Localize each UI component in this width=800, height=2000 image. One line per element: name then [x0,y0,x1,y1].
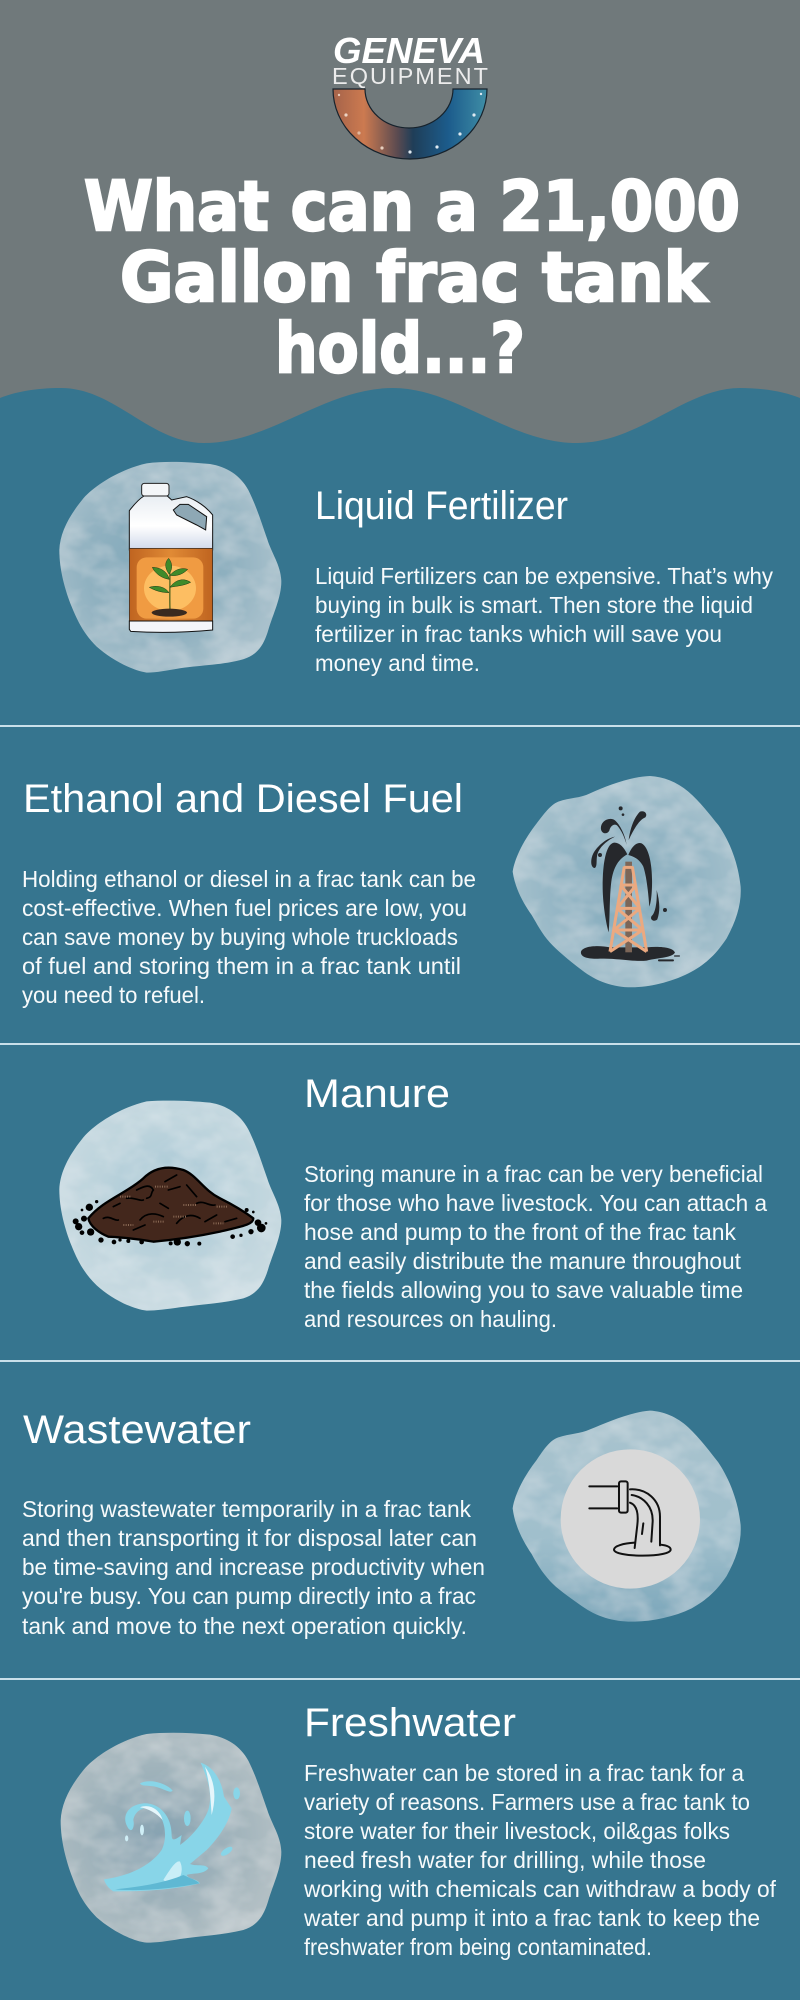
panel: freshwater [61,1701,776,1960]
text block: manure description: hose and pump to the front of the frac tank [304,1219,736,1245]
heading: Manure: Manure [304,1072,450,1116]
text block: fuel description: you need to refuel. [22,982,205,1008]
text block: wastewater description: you're busy. You can pump directly into a frac [22,1583,476,1609]
icon: water splash on watercolor blob [61,1733,281,1943]
heading: Freshwater: Freshwater [304,1701,516,1745]
text block: freshwater description: working with chemicals can withdraw a body of [303,1876,776,1902]
text block: wastewater description [22,1496,485,1639]
icon: fertilizer jug on watercolor blob [59,462,281,673]
title: What can a 21,000 [84,167,740,247]
text block: manure description: and easily distribute the manure throughout [304,1248,741,1274]
text block: liquid fertilizer description: money and time. [315,650,480,676]
panel: manure [59,1072,768,1332]
title: Gallon frac tank [120,238,709,318]
text block: liquid fertilizer description [315,563,773,676]
text block: fuel description: of fuel and storing them in a frac tank until [22,953,461,979]
text block: manure description [304,1161,768,1332]
text block: freshwater description [303,1760,776,1960]
panel: liquid fertilizer [59,462,773,676]
text block: fuel description [22,866,476,1008]
icon: manure pile on watercolor blob [59,1101,281,1311]
divider 3 [0,1360,800,1362]
text block: freshwater description: Freshwater can be stored in a frac tank for a [304,1760,745,1786]
text block: liquid fertilizer description: Liquid Fertilizers can be expensive. That’s why [315,563,773,589]
divider 4 [0,1678,800,1680]
heading: Wastewater: Wastewater [23,1408,251,1452]
text block: fuel description: can save money by buying whole truckloads [22,924,458,950]
text block: wastewater description: be time-saving and increase productivity when [22,1554,485,1580]
logo: Geneva Equipment: EQUIPMENT [332,63,488,89]
panel: ethanol and diesel fuel [22,776,741,1008]
title [84,167,740,389]
text block: liquid fertilizer description: buying in bulk is smart. Then store the liquid [315,592,753,618]
logo: Geneva Equipment [332,30,488,159]
text block: manure description: Storing manure in a frac can be very beneficial [304,1161,763,1187]
text block: manure description: and resources on hauling. [304,1306,557,1332]
icon: oil derrick gusher on watercolor blob [513,776,741,987]
heading: Liquid Fertilizer: Liquid Fertilizer [315,484,568,528]
text block: freshwater description: freshwater from being contaminated. [304,1934,652,1960]
heading: Ethanol and Diesel Fuel: Ethanol and Diesel Fuel [23,777,463,821]
divider 2 [0,1043,800,1045]
text block: wastewater description: tank and move to the next operation quickly. [22,1613,467,1639]
text block: freshwater description: water and pump it into a frac tank to keep the [303,1905,760,1931]
title: hold...? [275,309,525,389]
header band with wave edge [0,0,800,443]
divider 1 [0,725,800,727]
text block: freshwater description: store water for their livestock, oil&gas folks [304,1818,730,1844]
text block: manure description: for those who have livestock. You can attach a [304,1190,768,1216]
text block: wastewater description: Storing wastewater temporarily in a frac tank [22,1496,471,1522]
text block: fuel description: cost-effective. When fuel prices are low, you [22,895,467,921]
logo: Geneva Equipment: GENEVA [333,30,485,71]
text block: wastewater description: and then transporting it for disposal later can [22,1525,477,1551]
panel: wastewater [22,1408,741,1639]
text block: freshwater description: variety of reasons. Farmers use a frac tank to [304,1789,750,1815]
text block: liquid fertilizer description: fertilizer in frac tanks which will save you [315,621,722,647]
text block: freshwater description: need fresh water for drilling, while those [304,1847,706,1873]
text block: fuel description: Holding ethanol or diesel in a frac tank can be [22,866,476,892]
icon: discharge pipe on watercolor blob [513,1411,741,1622]
text block: manure description: the fields allowing you to save valuable time [304,1277,743,1303]
